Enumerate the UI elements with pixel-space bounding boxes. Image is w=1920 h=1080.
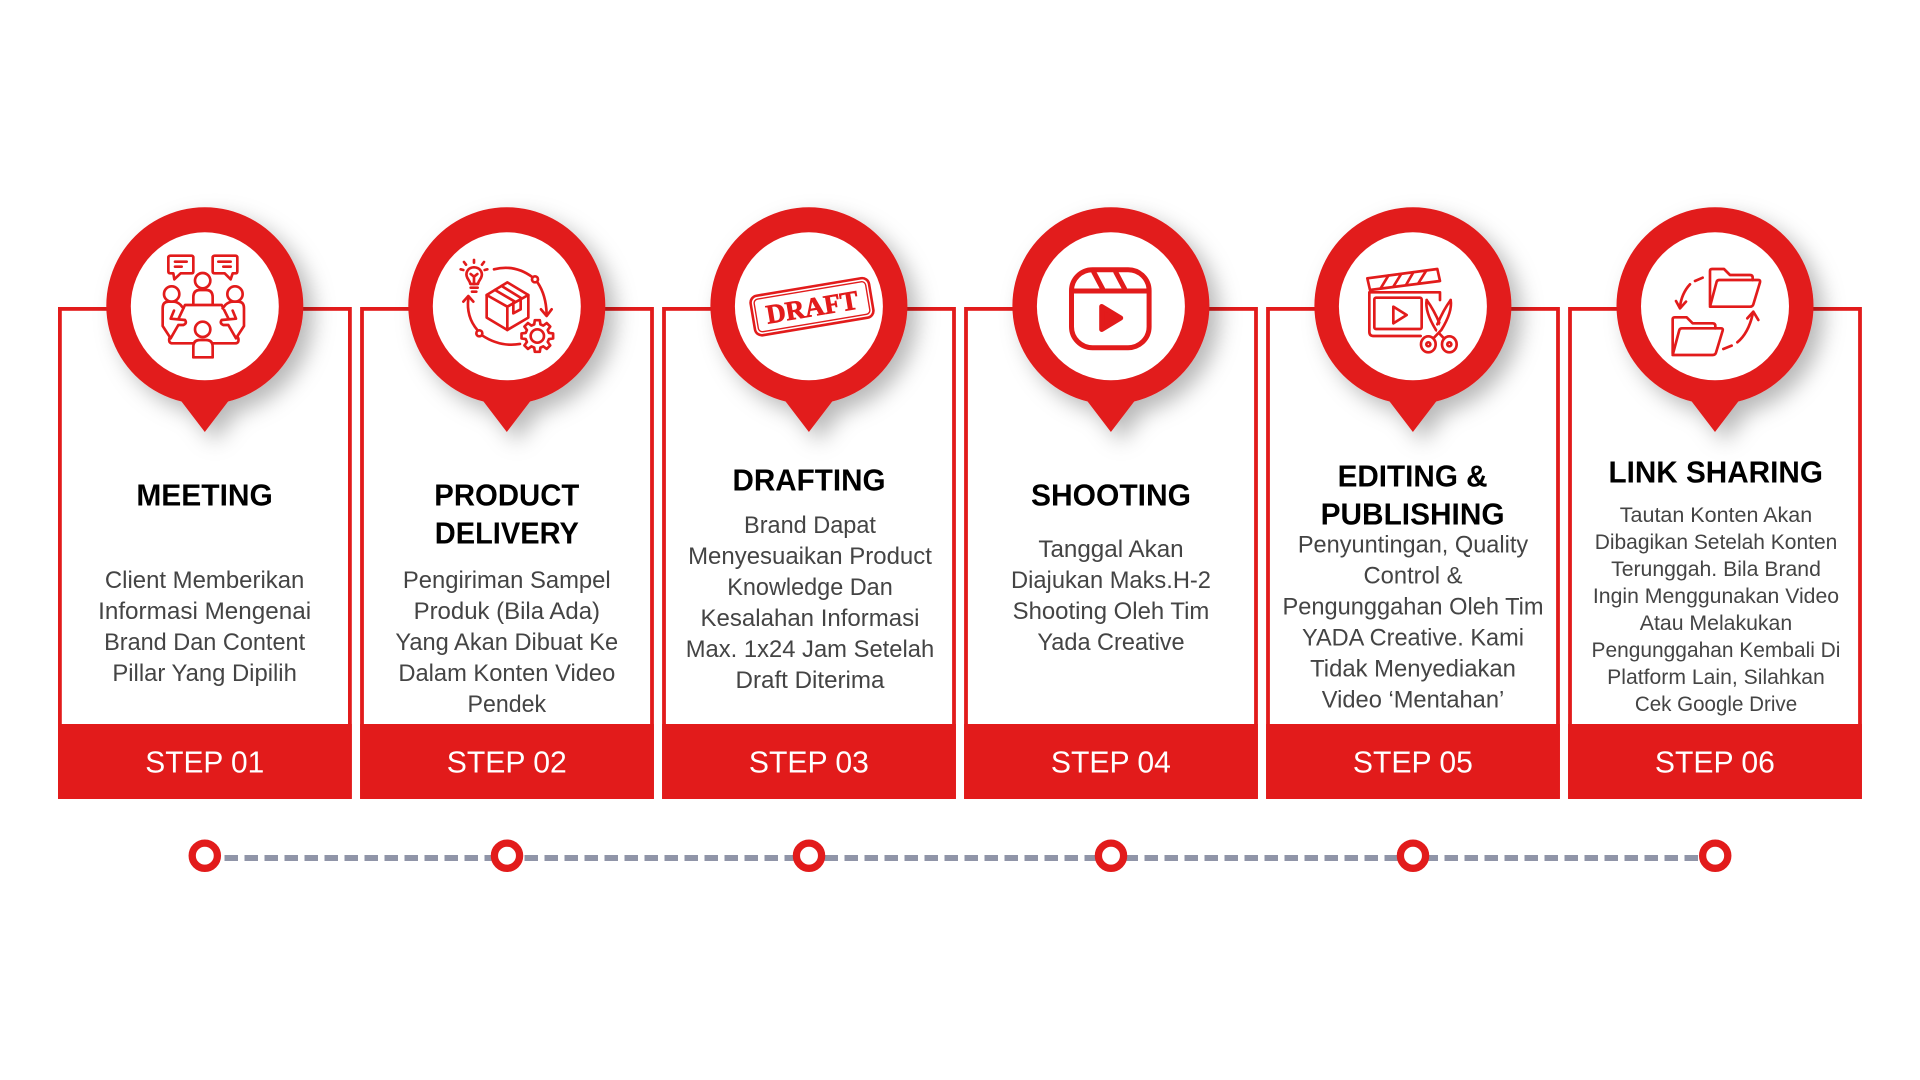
icon: video reel [1072,270,1149,348]
description: Penyuntingan, Quality [1298,532,1528,559]
panel frame [664,309,954,797]
description: Yada Creative [1037,629,1185,656]
description: Tautan Konten Akan [1620,504,1812,527]
panel: step 06 link sharing [1568,207,1862,799]
panel frame [60,309,350,797]
step 06 band [1568,724,1862,799]
description: Tanggal Akan [1038,536,1184,563]
panel frame [1570,309,1860,797]
description: Brand Dan Content [104,629,305,656]
icon: product box cycle [461,260,553,352]
description: Informasi Mengenai [98,598,311,625]
icon: draft stamp [750,277,874,336]
panel: step 04 shooting [964,207,1258,799]
description: Dibagikan Setelah Konten [1595,531,1837,554]
panel: step 01 meeting [58,207,352,799]
pin marker [106,207,303,432]
heading: DRAFTING [732,463,886,498]
description: Cek Google Drive [1635,693,1797,716]
pin marker [1012,207,1209,432]
panel: step 03 drafting [662,207,956,799]
description: Shooting Oleh Tim [1013,598,1209,625]
description: Platform Lain, Silahkan [1607,666,1825,689]
step 03 band: STEP 03 [749,745,869,780]
icon: clapperboard and scissors [1367,269,1457,352]
panel frame [1268,309,1558,797]
icon: folder exchange [1673,269,1760,355]
description: Draft Diterima [736,667,885,694]
heading [1321,458,1505,532]
description: Kesalahan Informasi [701,605,919,632]
step 05 band: STEP 05 [1353,745,1473,780]
step 01 band [58,724,352,799]
step 04 band: STEP 04 [1051,745,1171,780]
description: Produk (Bila Ada) [414,598,600,625]
step 06 band: STEP 06 [1655,745,1775,780]
description [686,512,934,694]
panel: step 05 editing and publishing [1266,207,1560,799]
description: Client Memberikan [105,567,304,594]
step 01 band: STEP 01 [145,745,264,780]
description: Pillar Yang Dipilih [112,660,297,687]
pin marker [1314,207,1511,432]
step 03 band [662,724,956,799]
description [1592,504,1840,716]
description: Pengunggahan Kembali Di [1592,639,1840,662]
description: Dalam Konten Video [398,660,615,687]
pin marker [408,207,605,432]
description: Pengunggahan Oleh Tim [1282,594,1544,621]
description: Diajukan Maks.H-2 [1011,567,1211,594]
heading: PRODUCT [434,478,579,513]
description [1011,536,1211,656]
panel frame [362,309,652,797]
description [1282,532,1544,714]
panel: step 02 product delivery [360,207,654,799]
description: Pengiriman Sampel [403,567,611,594]
description: Max. 1x24 Jam Setelah [686,636,934,663]
description: Yang Akan Dibuat Ke [395,629,618,656]
heading: MEETING [136,478,273,513]
step 05 band [1266,724,1560,799]
description: Video ‘Mentahan’ [1322,687,1504,714]
panel frame [966,309,1256,797]
description: Tidak Menyediakan [1310,656,1516,683]
heading: LINK SHARING [1608,454,1823,489]
pin marker [1616,207,1814,432]
description [395,567,618,718]
description: Brand Dapat [744,512,876,539]
description: YADA Creative. Kami [1302,625,1524,652]
heading: PUBLISHING [1321,497,1505,532]
description: Atau Melakukan [1640,612,1792,635]
icon: meeting [163,256,244,357]
description: Menyesuaikan Product [688,543,932,570]
heading: DELIVERY [435,516,579,550]
description: Pendek [468,691,547,718]
heading: EDITING & [1338,458,1488,493]
pin marker [710,207,907,432]
step 02 band [360,724,654,799]
heading [434,478,579,550]
description: Knowledge Dan [727,574,893,601]
icon: draft stamp: DRAFT [764,285,860,330]
description: Terunggah. Bila Brand [1611,558,1821,581]
timeline [192,843,1728,868]
description: Control & [1364,563,1462,590]
heading: SHOOTING [1031,478,1191,513]
step 04 band [964,724,1258,799]
step 02 band: STEP 02 [447,745,567,780]
description [98,567,311,687]
description: Ingin Menggunakan Video [1593,585,1839,608]
